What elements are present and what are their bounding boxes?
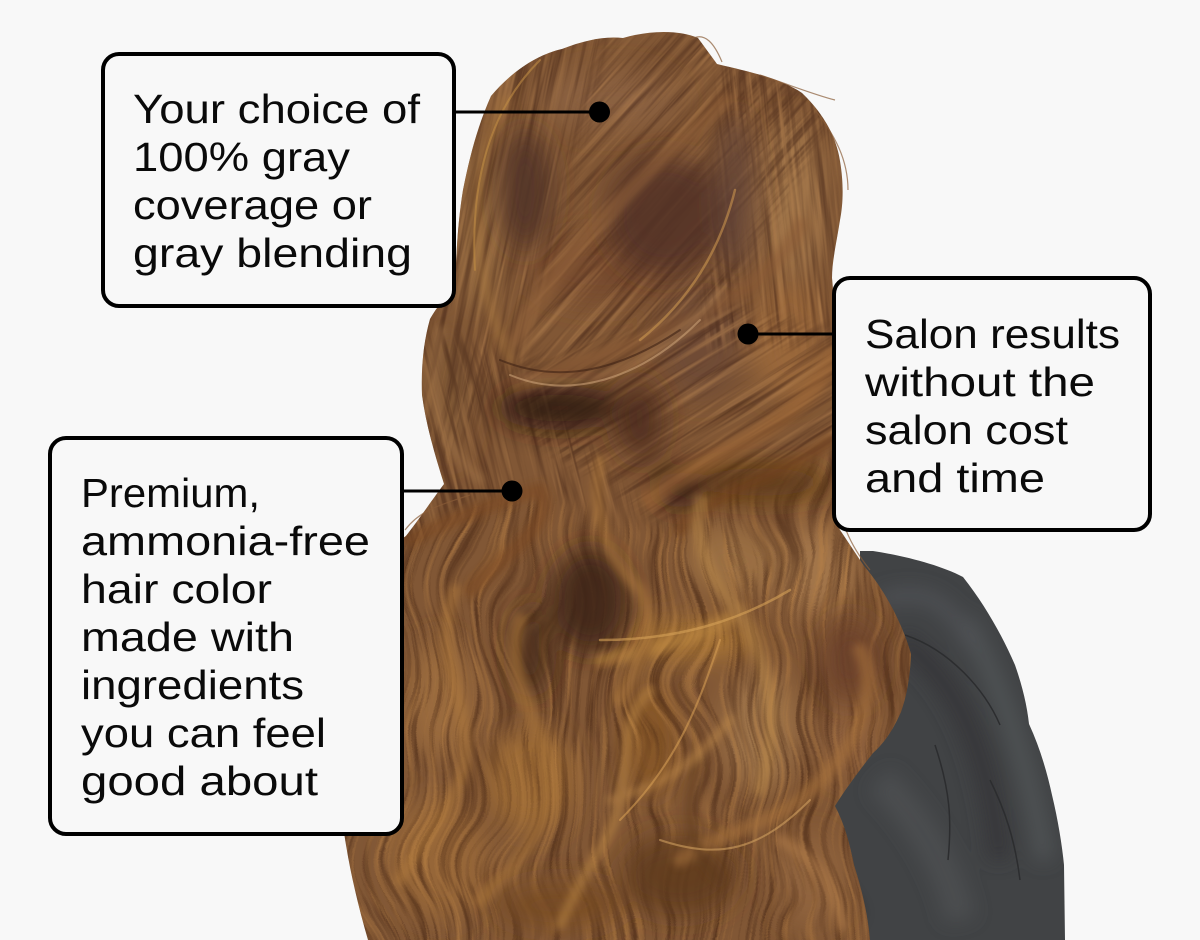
callout: ammonia-free formula: ammonia-free [81, 518, 370, 564]
callout: ammonia-free formula: hair color [81, 566, 272, 612]
callout: salon results: salon cost [865, 407, 1069, 453]
jacket [361, 545, 1070, 940]
hair strands [474, 60, 810, 850]
hair texture [344, 32, 911, 940]
callout: salon results: without the [864, 359, 1095, 405]
callout: gray coverage: Your choice of [133, 86, 421, 132]
hair [344, 32, 911, 940]
callout: ammonia-free formula: made with [81, 614, 294, 660]
callout: gray coverage: 100% gray [133, 134, 351, 180]
hair soft locks [400, 100, 868, 925]
callout: salon results [738, 278, 1150, 530]
callout: ammonia-free formula: you can feel [81, 710, 326, 756]
connector line and dot [454, 102, 610, 122]
callout: gray coverage: gray blending [133, 230, 412, 276]
callout: gray coverage: coverage or [133, 182, 372, 228]
hair shadows [496, 115, 878, 927]
callout: ammonia-free formula: ingredients [81, 662, 304, 708]
callout: ammonia-free formula [50, 438, 522, 834]
callout: gray coverage [103, 54, 610, 306]
hair tonal shading [390, 70, 876, 925]
callout: ammonia-free formula: good about [81, 758, 319, 804]
connector line and dot [738, 324, 836, 344]
callout: salon results: and time [865, 455, 1045, 501]
flyaway hairs [325, 37, 870, 830]
callout: salon results: Salon results [865, 311, 1120, 357]
callout: ammonia-free formula: Premium, [81, 470, 260, 516]
connector line and dot [400, 480, 522, 502]
